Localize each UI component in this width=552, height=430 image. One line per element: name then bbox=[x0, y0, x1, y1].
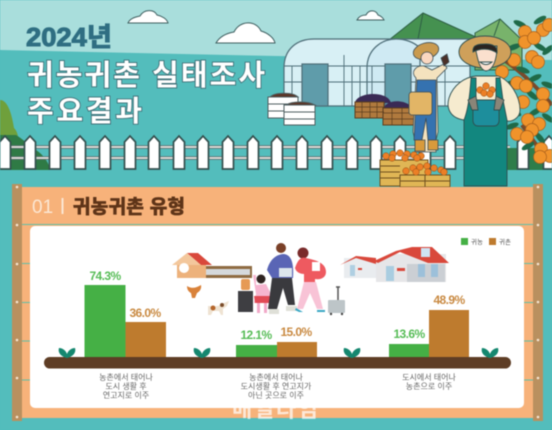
legend bbox=[461, 237, 511, 246]
left wooden post bbox=[12, 184, 22, 421]
category label 1: 도시 생활 후 bbox=[105, 381, 147, 391]
cloud left bbox=[128, 11, 168, 23]
persimmon crates bbox=[380, 150, 450, 187]
title: year: 2024년 bbox=[26, 22, 112, 52]
woman farmer bbox=[409, 40, 449, 152]
section number: 01 bbox=[32, 197, 53, 218]
illustration: black suitcase bbox=[238, 279, 253, 312]
category label 3: 농촌으로 이주 bbox=[406, 381, 452, 391]
category label 2: 도시생활 후 연고지가 bbox=[241, 381, 312, 391]
panel: white chart card bbox=[30, 226, 524, 408]
illustration: small house bbox=[340, 256, 376, 278]
legend: 귀촌 bbox=[499, 237, 511, 246]
bush right bbox=[507, 148, 552, 170]
bar group 1: 귀농 74.3% / 귀촌 36.0%: 36.0% bbox=[129, 306, 161, 320]
bar group 2: 귀농 12.1% / 귀촌 15.0% bbox=[236, 325, 317, 357]
ground line bbox=[44, 357, 511, 368]
bar group 3: 귀농 13.6% / 귀촌 48.9% bbox=[389, 293, 469, 357]
title: main heading: 귀농귀촌 실태조사 bbox=[27, 59, 265, 92]
right wooden post bbox=[533, 184, 543, 421]
panel: orange section background bbox=[22, 187, 533, 418]
category label 2 bbox=[241, 372, 312, 400]
illustration: grey suitcase bbox=[328, 287, 345, 315]
illustration: spotted dog bbox=[208, 301, 229, 315]
illustration: orange dog bbox=[187, 285, 201, 298]
watermark: 매일타임 bbox=[232, 397, 318, 422]
header divider and side ticks bbox=[22, 224, 533, 380]
category label 1: 연고지로 이주 bbox=[103, 390, 149, 400]
section separator bbox=[62, 198, 64, 214]
background: sky bbox=[0, 0, 552, 60]
category label 3 bbox=[402, 372, 457, 391]
bar group 1: 귀농 74.3% / 귀촌 36.0%: 74.3% bbox=[89, 269, 121, 283]
illustration: mother bbox=[295, 248, 326, 312]
berry crates bbox=[355, 94, 415, 125]
bar group 3: 귀농 13.6% / 귀촌 48.9%: 48.9% bbox=[433, 293, 465, 307]
legend: 귀농 bbox=[471, 237, 483, 246]
category label 1 bbox=[99, 372, 154, 400]
illustration: father bbox=[267, 243, 297, 314]
bar group 2: 귀농 12.1% / 귀촌 15.0%: 15.0% bbox=[280, 325, 312, 339]
illustration: child bbox=[253, 274, 272, 313]
title: main heading: 주요결과 bbox=[27, 95, 142, 128]
male farmer bbox=[448, 36, 520, 186]
bar group 2: 귀농 12.1% / 귀촌 15.0%: 12.1% bbox=[240, 328, 272, 342]
illustration: large house bbox=[374, 247, 449, 282]
persimmon tree bbox=[495, 14, 552, 163]
category label 3: 도시에서 태어나 bbox=[402, 372, 457, 382]
bar group 3: 귀농 13.6% / 귀촌 48.9%: 13.6% bbox=[393, 327, 425, 341]
category label 2: 아닌 곳으로 이주 bbox=[248, 390, 304, 400]
category label 1: 농촌에서 태어나 bbox=[99, 372, 154, 382]
illustration: dog house and pen bbox=[172, 253, 252, 278]
category label 2: 농촌에서 태어나 bbox=[249, 372, 304, 382]
section heading: 귀농귀촌 유형 bbox=[73, 196, 185, 218]
greenhouses bbox=[284, 39, 470, 106]
cloud middle bbox=[216, 23, 275, 43]
sprouts bbox=[59, 348, 498, 358]
fence right bbox=[518, 136, 552, 169]
cloud right bbox=[357, 11, 384, 20]
bar group 1: 귀농 74.3% / 귀촌 36.0% bbox=[84, 269, 166, 357]
bush behind fence bbox=[0, 100, 50, 170]
mountains bbox=[389, 13, 522, 70]
title: main heading bbox=[27, 59, 265, 128]
fence bbox=[0, 136, 510, 169]
white crates bbox=[268, 93, 315, 125]
